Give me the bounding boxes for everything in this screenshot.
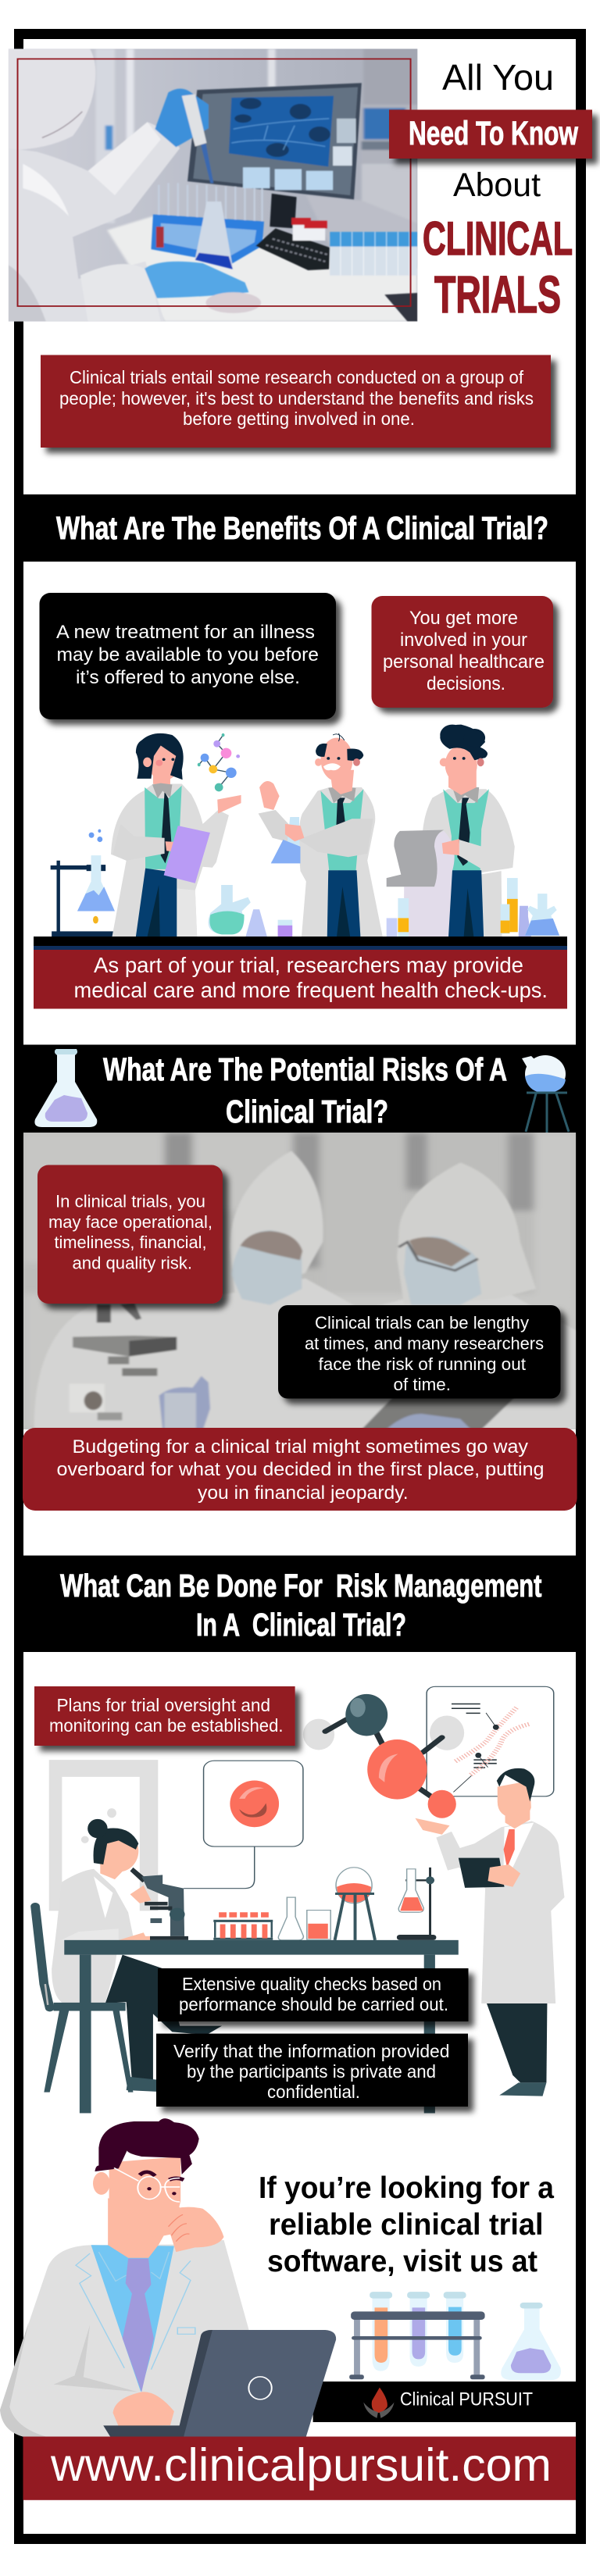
callout: running out of time: of time. — [394, 1375, 451, 1394]
callout: new treatment — [39, 593, 336, 719]
callout: more involved: involved in your — [400, 630, 527, 651]
panel: risks lower background — [23, 1133, 576, 1556]
tube rack right — [330, 237, 417, 276]
callout: budgeting: overboard for what you decided in the first place, putting — [56, 1459, 544, 1480]
board with DNA — [427, 1686, 554, 1796]
callout: operational risk: and quality risk. — [72, 1253, 192, 1273]
title line: All You: All You — [442, 57, 554, 98]
callout: budgeting — [23, 1428, 577, 1511]
tie — [123, 2258, 154, 2392]
callout: verify information: by the participants is private and — [187, 2061, 436, 2082]
icon: flask on tripod right of heading — [522, 1055, 569, 1133]
coat creases — [54, 2325, 138, 2392]
blue gloved hand with beaker — [159, 1376, 210, 1429]
logo band: Clinical Pursuit — [313, 2382, 576, 2422]
keyboard — [255, 228, 330, 270]
callout: more involved: You get more — [409, 608, 518, 629]
lower hand — [112, 2392, 174, 2427]
test tubes in blue rack — [159, 183, 262, 223]
laptop base — [103, 2425, 188, 2437]
icon: molecule — [198, 733, 240, 791]
callout: oversight plans: Plans for trial oversight and — [56, 1695, 270, 1715]
microscope — [130, 1868, 188, 1940]
callout: budgeting: you in financial jeopardy. — [198, 1482, 409, 1504]
glasses — [114, 2168, 180, 2202]
illustration: thinking man at laptop — [0, 2118, 336, 2437]
icon: test tube rack and flask — [349, 2292, 561, 2380]
title — [389, 57, 592, 324]
title line: About: About — [453, 166, 541, 204]
banner: website: www.clinicalpursuit.com — [50, 2439, 552, 2491]
callout: more involved — [372, 596, 553, 708]
icon: glassware group right — [501, 878, 559, 937]
callout: verify information: Verify that the information provided — [173, 2041, 450, 2061]
figure: scientist with paper scroll — [387, 725, 515, 937]
callout: operational risk — [38, 1165, 223, 1304]
lapels — [76, 2252, 191, 2370]
callout: new treatment: A new treatment for an illness — [56, 622, 315, 643]
coat shadow — [0, 2322, 46, 2437]
callout: intro: before getting involved in one. — [183, 409, 415, 429]
callout: running out of time — [278, 1305, 561, 1398]
glasses lens — [138, 2177, 161, 2200]
laptop lid edge — [177, 2330, 212, 2437]
heading: potential risks: Clinical Trial? — [226, 1094, 388, 1129]
callout: budgeting: Budgeting for a clinical trial might sometimes go way — [72, 1436, 529, 1457]
callout: more involved: decisions. — [427, 673, 505, 694]
petri dish — [206, 292, 261, 313]
pocket — [177, 2328, 195, 2334]
callout: verify information — [156, 2034, 468, 2107]
hood and suit — [9, 48, 95, 150]
callout: running out of time: face the risk of running out — [319, 1354, 527, 1374]
laptop logo — [248, 2377, 272, 2399]
callout: oversight plans — [34, 1686, 295, 1746]
callout: running out of time: at times, and many researchers — [305, 1334, 544, 1354]
figure: bald scientist — [259, 733, 383, 937]
table — [64, 1940, 459, 2113]
window — [49, 1760, 158, 1911]
call to action text: If you’re looking for a — [259, 2171, 554, 2205]
laptop lid — [184, 2330, 336, 2437]
callout: quality checks: performance should be carried out. — [179, 1994, 448, 2014]
panel: benefits background — [23, 562, 576, 1045]
cell callout — [184, 1761, 303, 1889]
researcher bodies — [34, 1279, 576, 1429]
ear — [93, 2172, 110, 2195]
callout: running out of time: Clinical trials can be lengthy — [315, 1313, 530, 1333]
red capped jars — [293, 223, 325, 241]
heading: risk management — [60, 1568, 542, 1643]
callout: more involved: personal healthcare — [383, 651, 545, 673]
icon: glassware group centre — [209, 885, 409, 937]
figure: male scientist with tablet — [415, 1768, 564, 2096]
tablet and hand — [362, 1398, 514, 1428]
callout: verify information: confidential. — [267, 2082, 360, 2102]
microscope — [70, 1303, 177, 1420]
call to action text: reliable clinical trial — [269, 2208, 544, 2242]
coat — [0, 2240, 248, 2437]
callout: new treatment: may be available to you before — [56, 644, 319, 665]
callout: medical care with table edge — [34, 937, 567, 1009]
figure: woman at microscope — [35, 1819, 222, 2093]
shirt — [91, 2245, 174, 2392]
hand on chin — [164, 2207, 224, 2252]
glassware on table — [213, 1868, 436, 1940]
monitor — [188, 83, 362, 199]
callout: operational risk: may face operational, — [48, 1212, 212, 1232]
callout: quality checks — [158, 1968, 469, 2021]
callout: medical care with table edge: As part of your trial, researchers may provide — [94, 953, 523, 977]
icon: flask left of heading — [34, 1049, 97, 1127]
callout: oversight plans: monitoring can be established. — [49, 1715, 283, 1736]
hood: researcher two — [397, 1162, 536, 1304]
call to action text: software, visit us at — [267, 2245, 538, 2278]
heading: potential risks — [103, 1051, 507, 1129]
illustration: lab scene with molecule and scientists — [35, 1686, 564, 2113]
neck — [108, 2198, 180, 2258]
callout: intro — [41, 355, 551, 448]
panel: intro background — [23, 39, 576, 494]
blue gloves and pipette — [155, 88, 209, 147]
title banner: Need To Know — [389, 109, 592, 159]
finger lines — [169, 2214, 189, 2242]
heading: risk management: In A Clinical Trial? — [196, 1607, 406, 1643]
photo outline frame — [18, 59, 411, 306]
callout: medical care with table edge: medical care and more frequent health check-ups. — [73, 978, 548, 1002]
callout: operational risk: timeliness, financial, — [55, 1233, 206, 1252]
illustration: three scientists with lab equipment — [51, 725, 559, 937]
icon: drop in hands — [363, 2388, 394, 2418]
photo: two researchers in protective suits — [23, 1133, 576, 1429]
brows and eyes — [140, 2172, 184, 2180]
callout: intro: people; however, it's best to understand the benefits and risks — [59, 388, 534, 409]
panel: risk management background — [23, 1652, 576, 2534]
icon: flask on stand — [51, 830, 129, 937]
figure: woman scientist — [111, 733, 241, 937]
hood: researcher one — [230, 1151, 323, 1294]
logo band: Clinical Pursuit: Clinical PURSUIT — [400, 2389, 533, 2410]
call to action text — [259, 2171, 554, 2278]
face — [109, 2157, 180, 2237]
molecule — [303, 1694, 456, 1818]
pupils — [149, 2189, 174, 2193]
callout: intro: Clinical trials entail some research conducted on a group of — [70, 367, 524, 387]
callout: quality checks: Extensive quality checks based on — [182, 1974, 441, 1994]
callout: new treatment: it’s offered to anyone else. — [76, 667, 300, 688]
hair — [95, 2118, 199, 2175]
callout: operational risk: In clinical trials, you — [55, 1192, 205, 1211]
photo: lab technician pipetting — [9, 48, 417, 322]
